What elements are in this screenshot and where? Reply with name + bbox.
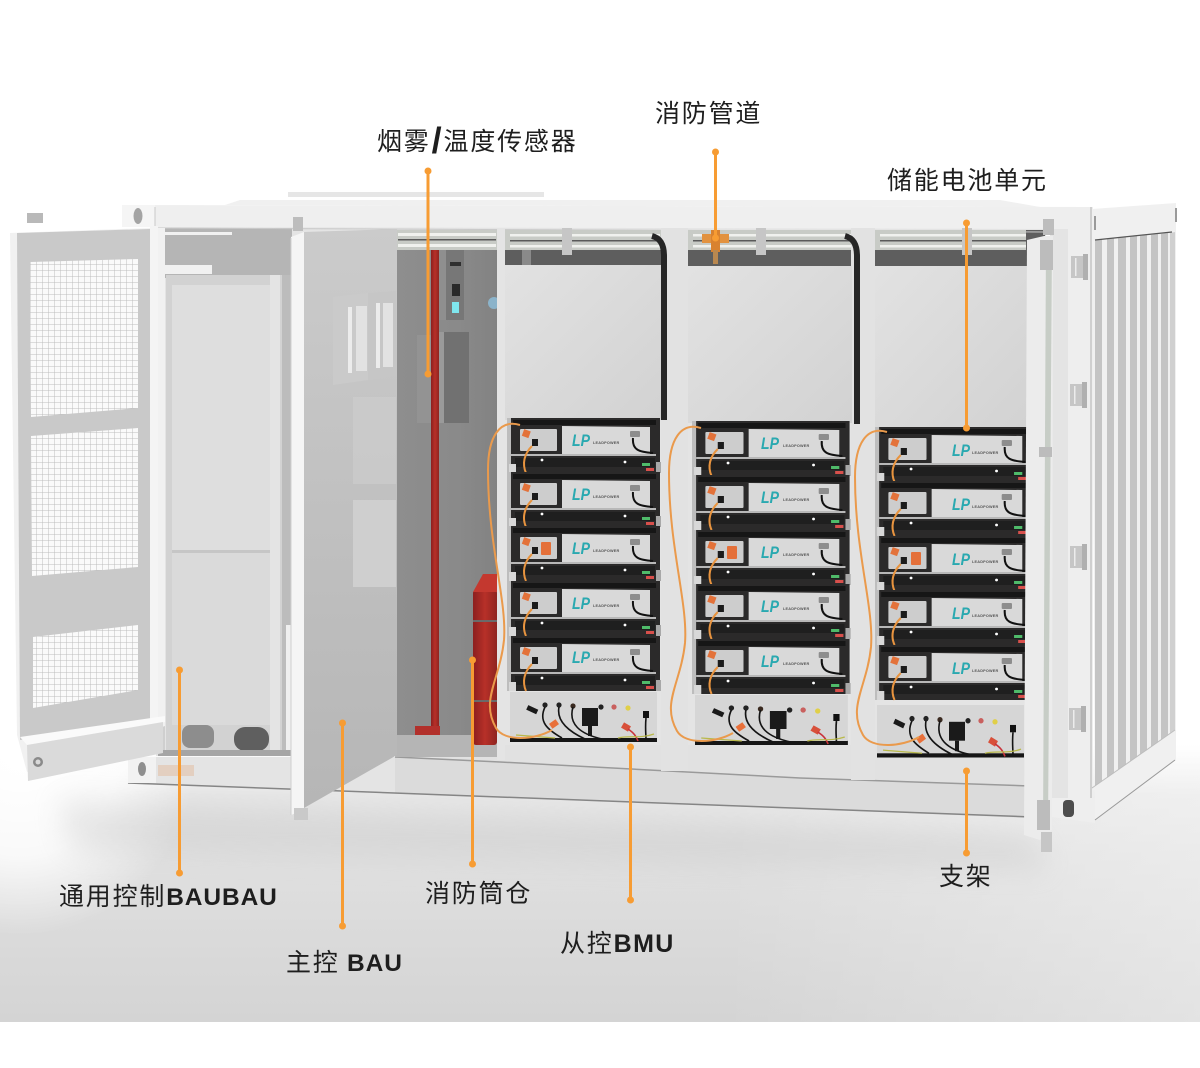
- module 1-5: LEADPOWER: [593, 658, 620, 662]
- module 1-3: LP: [572, 539, 591, 558]
- module 3-4: [875, 590, 1034, 645]
- container interior backdrop: [156, 226, 1046, 756]
- module 1-2: [507, 472, 661, 527]
- leader: main BAU: [340, 720, 346, 929]
- red fire pipe: [415, 250, 440, 735]
- top beam: [122, 205, 1092, 232]
- hinge 1: [1071, 254, 1088, 280]
- module 1-5: LP: [572, 648, 591, 667]
- fire-room interior: [395, 230, 500, 757]
- module 1-4: LEADPOWER: [593, 604, 620, 608]
- leader: general control BAU: [176, 667, 182, 876]
- container base: [128, 745, 1032, 818]
- label: general control BAU: 通用控制BAUBAU: [59, 877, 278, 913]
- top hinge pin: [27, 213, 43, 223]
- module 3-1: LP: [952, 441, 971, 460]
- label: fire pipeline: 消防管道: [655, 94, 762, 130]
- module 2-2: [692, 475, 851, 530]
- panel glow: [488, 297, 500, 309]
- module 3-2: [875, 481, 1034, 536]
- module 3-5: [875, 645, 1034, 700]
- module 2-1: LEADPOWER: [783, 444, 810, 448]
- module 2-4: LP: [761, 597, 780, 616]
- module 2-5: [692, 639, 851, 694]
- leader: slave BMU: [628, 744, 634, 903]
- label: fire cylinder bay: 消防筒仓: [425, 874, 532, 910]
- hinge 3: [1070, 544, 1087, 570]
- module 3-4: LP: [952, 604, 971, 623]
- module 3-4: LEADPOWER: [972, 614, 999, 618]
- door bottom pin: [294, 808, 308, 820]
- orange manifold valve: [702, 230, 729, 264]
- module 1-5: [507, 636, 661, 691]
- module 3-3: LEADPOWER: [972, 560, 999, 564]
- module 3-2: LP: [952, 495, 971, 514]
- fire extinguisher: [473, 574, 497, 745]
- lower mesh: [33, 625, 138, 708]
- module 1-1: LEADPOWER: [593, 441, 620, 445]
- battery column 2: [669, 421, 851, 745]
- sensor controller box: [438, 250, 469, 423]
- label: smoke/temperature sensor: 烟雾: [377, 122, 431, 158]
- right corner post: [1050, 207, 1095, 823]
- leader: fire pipeline: [712, 149, 718, 241]
- door lower edge: [20, 716, 165, 745]
- module 2-1: [692, 421, 851, 476]
- module 3-3: LP: [952, 550, 971, 569]
- container roof detail: [225, 192, 1040, 207]
- module 1-4: [507, 581, 661, 636]
- orange cable 1: [488, 424, 552, 738]
- cable hole: [234, 727, 269, 751]
- leader: smoke/temperature sensor: [425, 168, 431, 377]
- vent hole: [182, 725, 214, 748]
- right open door edge: [1024, 219, 1054, 852]
- module 3-5: LP: [952, 659, 971, 678]
- battery column 3: [855, 427, 1034, 758]
- rack frame: [497, 228, 1026, 780]
- corner casting: [1052, 798, 1095, 823]
- battery column 1: [488, 418, 661, 742]
- module 1-3: [507, 526, 661, 581]
- BMU 2: [695, 695, 848, 745]
- module 2-2: LP: [761, 488, 780, 507]
- module 1-3: LEADPOWER: [593, 549, 620, 553]
- label: bracket: 支架: [939, 857, 993, 893]
- hinge 2: [1070, 382, 1087, 408]
- module 2-4: LEADPOWER: [783, 607, 810, 611]
- door box lower: [353, 500, 396, 587]
- module 2-3: LP: [761, 543, 780, 562]
- door post: [150, 226, 158, 726]
- module 2-3: LEADPOWER: [783, 553, 810, 557]
- door vent plates: [333, 291, 396, 385]
- main BAU door: [291, 217, 397, 815]
- module 2-2: LEADPOWER: [783, 498, 810, 502]
- module 1-4: LP: [572, 594, 591, 613]
- label: smoke/temperature sensor: 温度传感器: [444, 122, 578, 158]
- leader: bracket: [964, 768, 970, 856]
- module 3-1: LEADPOWER: [972, 451, 999, 455]
- orange cable 2: [669, 427, 733, 741]
- module 2-5: LEADPOWER: [783, 662, 810, 666]
- middle mesh: [31, 428, 138, 576]
- label: slave BMU: 从控BMU: [560, 924, 675, 960]
- module 3-3: [875, 536, 1034, 591]
- hinge 4: [1069, 706, 1086, 732]
- BMU 3: [877, 705, 1024, 758]
- leader: fire cylinder bay: [470, 657, 476, 867]
- ground background: [0, 745, 1200, 1022]
- upper mesh: [30, 259, 138, 417]
- orange cable 3: [855, 431, 919, 745]
- black cable trunks: [652, 236, 857, 424]
- left compartment: general control BAU: [158, 228, 292, 756]
- module 3-5: LEADPOWER: [972, 669, 999, 673]
- hinge pins: [293, 217, 303, 231]
- label: battery storage unit: 储能电池单元: [887, 161, 1048, 197]
- module 2-1: LP: [761, 434, 780, 453]
- label: main BAU: 主控 BAU: [286, 943, 403, 979]
- module 1-1: LP: [572, 431, 591, 450]
- cable tray rails: [505, 230, 1026, 250]
- door box upper: [353, 397, 396, 484]
- BMU 1: [510, 692, 657, 742]
- leader: battery unit: [964, 220, 970, 431]
- module 1-2: LEADPOWER: [593, 495, 620, 499]
- door bottom flap: [27, 722, 163, 781]
- label: smoke/temperature sensor: /: [432, 120, 443, 161]
- module 2-4: [692, 584, 851, 639]
- left mesh door: [10, 213, 165, 781]
- module 1-1: [507, 418, 661, 473]
- corrugated side wall: [1092, 203, 1177, 820]
- module 1-2: LP: [572, 485, 591, 504]
- upper blank panels: [505, 265, 1027, 428]
- module 3-1: [875, 427, 1034, 482]
- module 2-5: LP: [761, 652, 780, 671]
- module 2-3: [692, 530, 851, 585]
- module 3-2: LEADPOWER: [972, 505, 999, 509]
